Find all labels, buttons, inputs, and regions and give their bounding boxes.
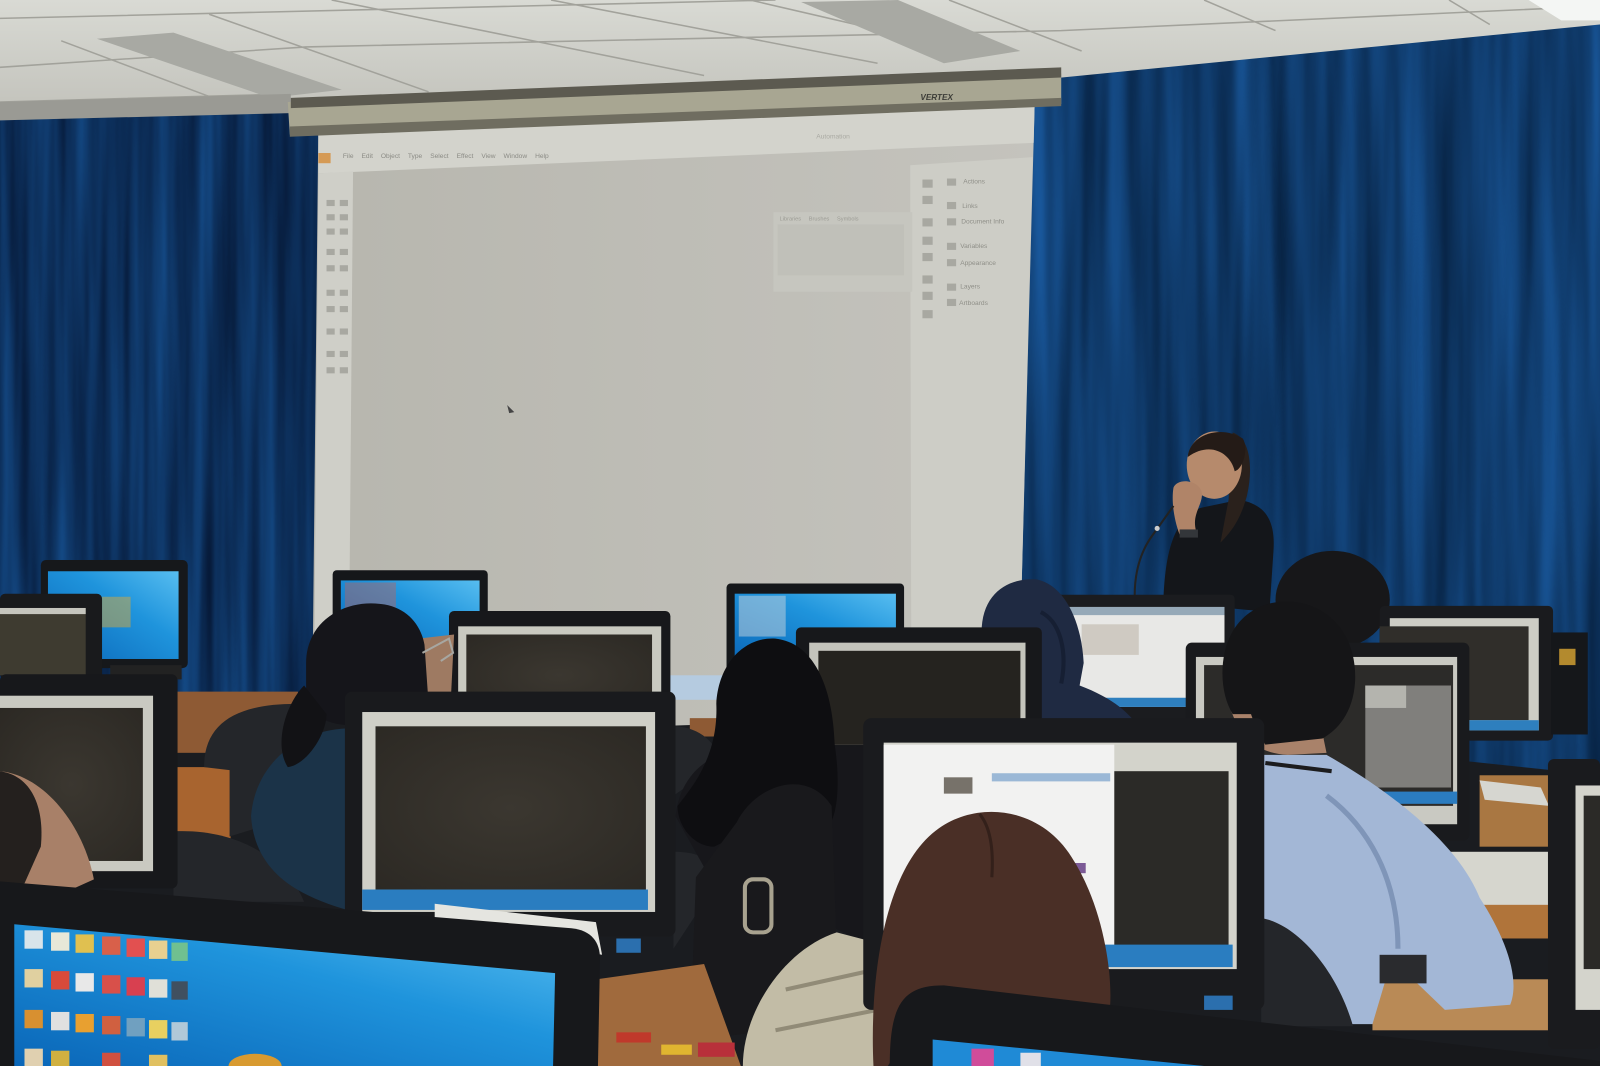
person: long hair woman [676, 638, 865, 943]
panel: dock labels: Document Info [961, 218, 1005, 225]
person: hooded [982, 579, 1143, 745]
icon: mouse pointer [507, 405, 514, 413]
panel: swatches [773, 212, 912, 292]
monitor: back far right [1380, 606, 1588, 741]
monitor: front right [890, 985, 1600, 1066]
monitor: back centre left [333, 570, 488, 662]
monitor: back right bright [1057, 595, 1235, 719]
projector screen [312, 102, 1035, 726]
monitor: centre main [345, 692, 676, 955]
panel: dock icons [922, 179, 956, 318]
chairs: back row [173, 704, 720, 949]
panel: tool column [327, 200, 348, 373]
person: woman with glasses [251, 603, 459, 910]
person: woman in foreground [873, 812, 1110, 1066]
panel: dock labels [959, 179, 1005, 307]
chair: under blue shirt man [1261, 918, 1353, 1026]
blue curtains [0, 20, 1600, 785]
monitor: back row centre [796, 627, 1042, 750]
panel: dock labels: Appearance [960, 260, 996, 267]
front desk items [597, 964, 741, 1066]
monitor: left mid [0, 674, 178, 889]
panel: dock labels: Variables [960, 243, 988, 250]
panel: dock labels: Links [962, 203, 978, 210]
person: left edge front [0, 771, 94, 890]
person: dark-haired back [1276, 551, 1390, 649]
panel: swatches: Libraries Brushes Symbols [780, 216, 859, 222]
workspace label: Automation [816, 134, 850, 141]
monitor: right main [863, 718, 1264, 1010]
monitor: far left dark [0, 594, 102, 679]
panel: dock labels: Artboards [959, 300, 989, 307]
monitor: back left [41, 560, 188, 679]
screen housing: VERTEX [920, 93, 953, 102]
monitor: back centre right [727, 583, 904, 671]
screen menu text: File Edit Object Type Select Effect View Window Help [343, 153, 549, 160]
monitor: mid right [1186, 643, 1469, 841]
person: blue shirt man [1222, 601, 1514, 1024]
ceiling [0, 0, 1600, 128]
monitor: back row centre left [449, 611, 670, 723]
monitor: right edge [1548, 759, 1600, 1049]
presenter [1135, 432, 1274, 612]
panel: dock labels: Layers [960, 284, 981, 291]
monitor: front left desktop [0, 881, 600, 1066]
black backpack [631, 784, 837, 1038]
panel: dock labels: Actions [963, 179, 986, 186]
beige bag [743, 932, 884, 1066]
screen housing [288, 67, 1061, 137]
desks back [176, 692, 1551, 1030]
